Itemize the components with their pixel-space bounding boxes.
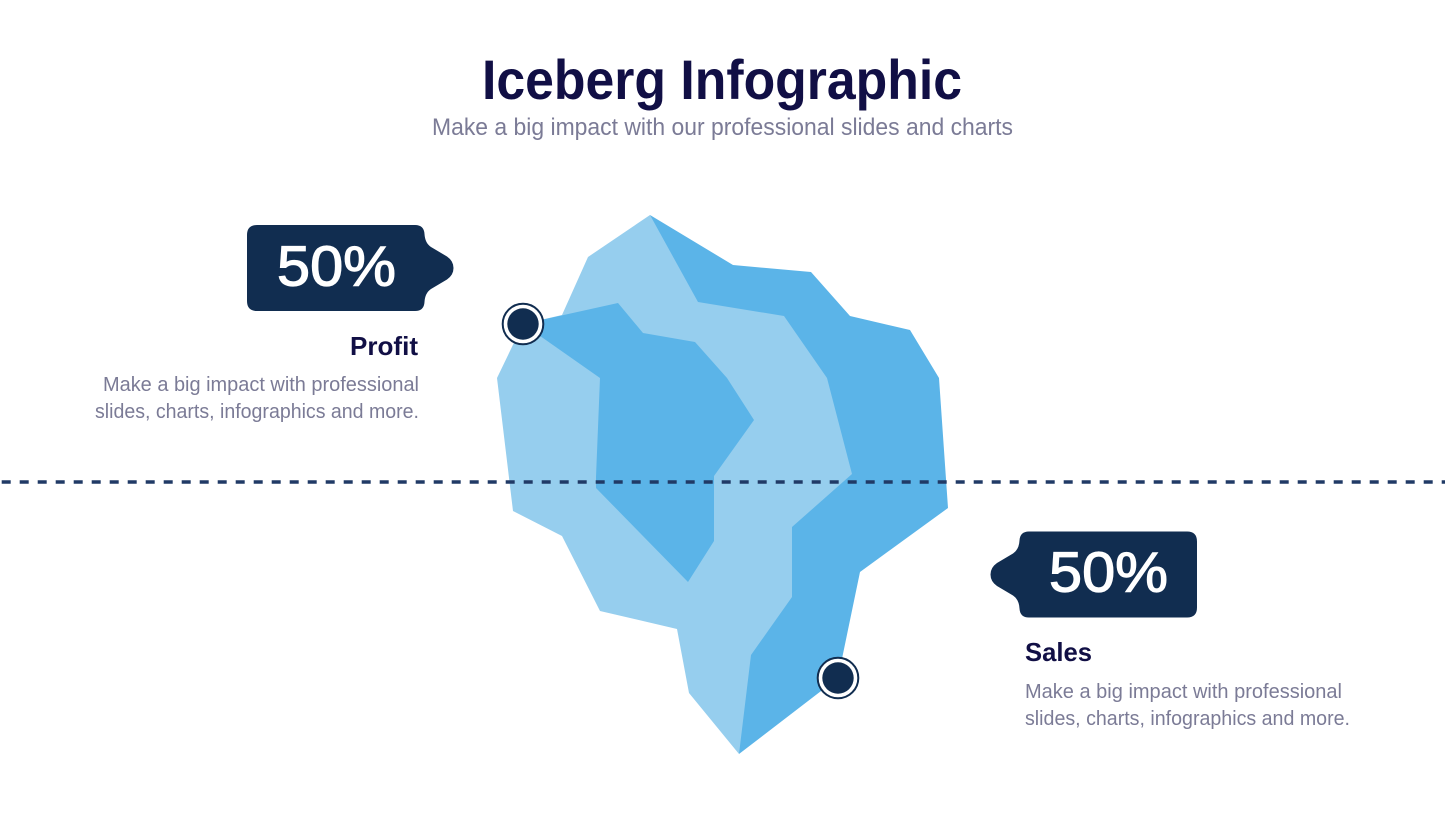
title: Iceberg Infographic <box>482 48 962 111</box>
iceberg right dark facet <box>650 215 948 754</box>
sales label: Sales <box>1025 637 1092 667</box>
iceberg light body <box>497 215 858 754</box>
sales description: slides, charts, infographics and more. <box>1025 708 1350 730</box>
waterline dashed <box>0 480 1445 484</box>
subtitle: Make a big impact with our professional slides and charts <box>432 114 1013 141</box>
callout: sales 50% <box>990 532 1197 618</box>
iceberg inner dark facet <box>523 303 754 582</box>
callout: profit 50%: 50% <box>277 234 396 298</box>
marker: top left <box>503 304 543 344</box>
sales description: Make a big impact with professional <box>1025 681 1342 703</box>
marker: bottom right <box>818 658 858 698</box>
profit description <box>95 374 419 423</box>
sales description <box>1025 681 1350 730</box>
profit description: Make a big impact with professional <box>103 374 419 396</box>
profit label: Profit <box>350 331 418 361</box>
profit description: slides, charts, infographics and more. <box>95 401 419 423</box>
callout: sales 50%: 50% <box>1049 540 1168 604</box>
callout: profit 50% <box>247 225 454 311</box>
iceberg illustration <box>497 215 948 754</box>
